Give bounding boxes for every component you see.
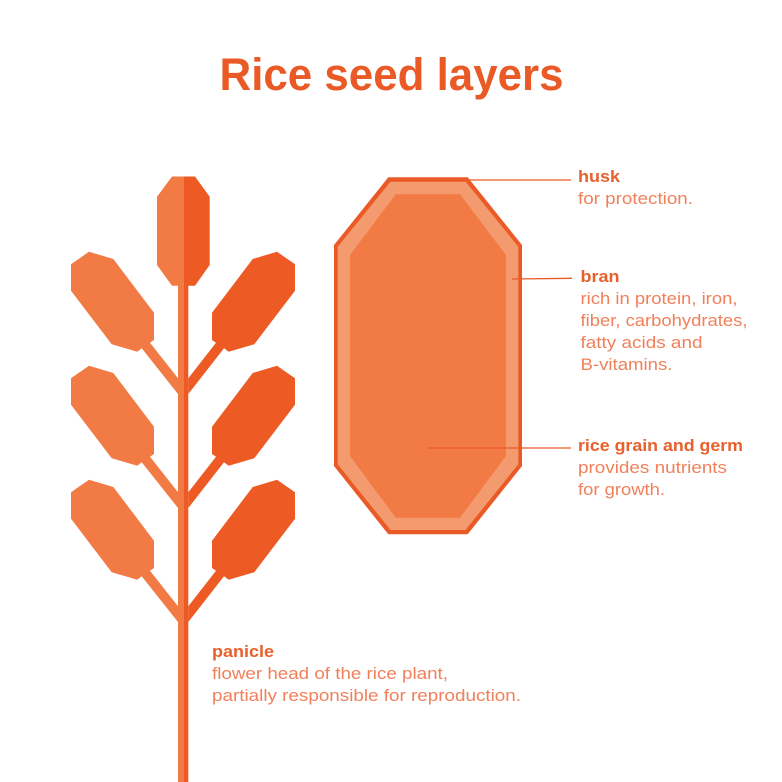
leader line: bran [512,277,572,280]
label: husk: for protection. [578,189,693,208]
rice grain and germ [350,194,506,518]
husk layer [334,177,522,534]
label: panicle: partially responsible for reproduction. [212,686,521,705]
top seed [157,176,210,286]
icon: rice panicle plant [71,176,295,782]
label: rice grain and germ: rice grain and germ [578,436,743,455]
label: rice grain and germ: provides nutrients [578,458,727,477]
panicle stem [178,280,188,782]
left seeds and branches [71,252,178,622]
label: panicle: panicle [212,642,274,661]
label: rice grain and germ [578,436,743,499]
label: bran: B-vitamins. [580,355,672,374]
label: panicle [212,642,521,705]
label: bran [580,267,748,374]
leader line: rice grain and germ [428,447,571,449]
right seeds and branches [188,252,295,622]
label: panicle: flower head of the rice plant, [212,664,448,683]
leader line: husk [466,179,571,181]
bran layer [338,182,518,530]
label: bran: bran [580,267,620,286]
label: bran: rich in protein, iron, [580,289,738,308]
label: rice grain and germ: for growth. [578,480,665,499]
label: bran: fiber, carbohydrates, [580,311,748,330]
label: husk: husk [578,167,621,186]
label: husk [578,167,693,208]
title: Rice seed layers [220,49,564,100]
label: bran: fatty acids and [580,333,702,352]
diagram: rice seed cross-section [334,177,522,534]
